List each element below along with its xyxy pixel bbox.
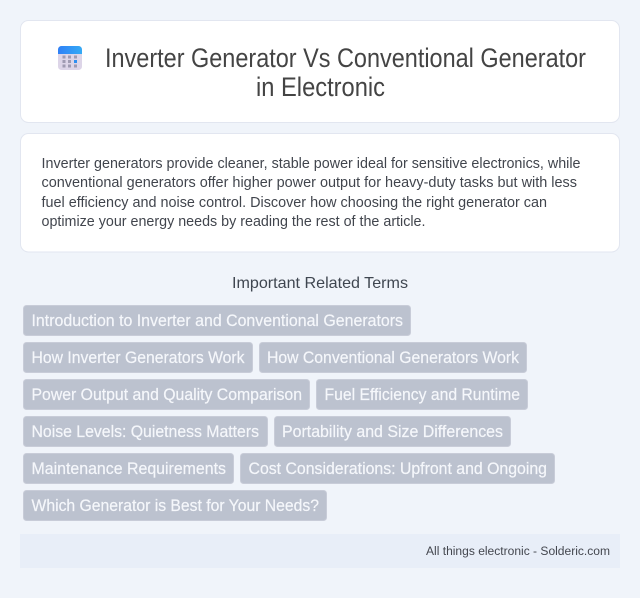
tag: how inverter generators work: How Inverter Generators Work (32, 349, 245, 367)
tag: portability: Portability and Size Differences (282, 423, 503, 441)
tag: maintenance (24, 454, 234, 484)
panel: title card (20, 20, 620, 122)
footer band (20, 534, 620, 568)
text block: description: conventional generators offer higher power output for heavy-duty tasks but with less (42, 175, 577, 191)
tag: noise levels (24, 416, 268, 446)
text block: description: fuel efficiency and noise control. Discover how choosing the right generator can (42, 195, 547, 211)
tag: introduction (24, 306, 410, 336)
tag: portability (274, 416, 510, 446)
tag: noise levels: Noise Levels: Quietness Matters (32, 423, 259, 441)
panel: related term tags (24, 306, 554, 520)
tag: how conventional generators work: How Conventional Generators Work (267, 349, 520, 367)
panel: description card (20, 134, 620, 252)
tag: power output and quality: Power Output and Quality Comparison (32, 386, 302, 404)
tag: fuel efficiency (316, 380, 528, 410)
tag: how inverter generators work (24, 342, 252, 372)
title (105, 43, 586, 102)
tag: which generator (24, 490, 326, 520)
tag: which generator: Which Generator is Best for Your Needs? (32, 497, 319, 515)
tag: fuel efficiency: Fuel Efficiency and Runtime (324, 386, 520, 404)
title: in Electronic (256, 72, 385, 102)
tag: power output and quality (24, 380, 310, 410)
title: Inverter Generator Vs Conventional Generator (105, 43, 586, 73)
footer text: All things electronic - Solderic.com (426, 544, 610, 558)
text block: description: optimize your energy needs by reading the rest of the article. (42, 214, 426, 230)
tag: cost considerations (240, 454, 554, 484)
text block: description (42, 156, 580, 230)
text block: description: Inverter generators provide cleaner, stable power ideal for sensitive electronics, while (42, 156, 580, 172)
tag: introduction: Introduction to Inverter and Conventional Generators (32, 312, 403, 330)
icon: calendar grid (58, 46, 82, 70)
tag: how conventional generators work (260, 342, 526, 372)
tag: maintenance: Maintenance Requirements (32, 460, 226, 478)
tag: cost considerations: Cost Considerations: Upfront and Ongoing (248, 460, 547, 478)
heading: important related terms: Important Related Terms (232, 275, 408, 292)
